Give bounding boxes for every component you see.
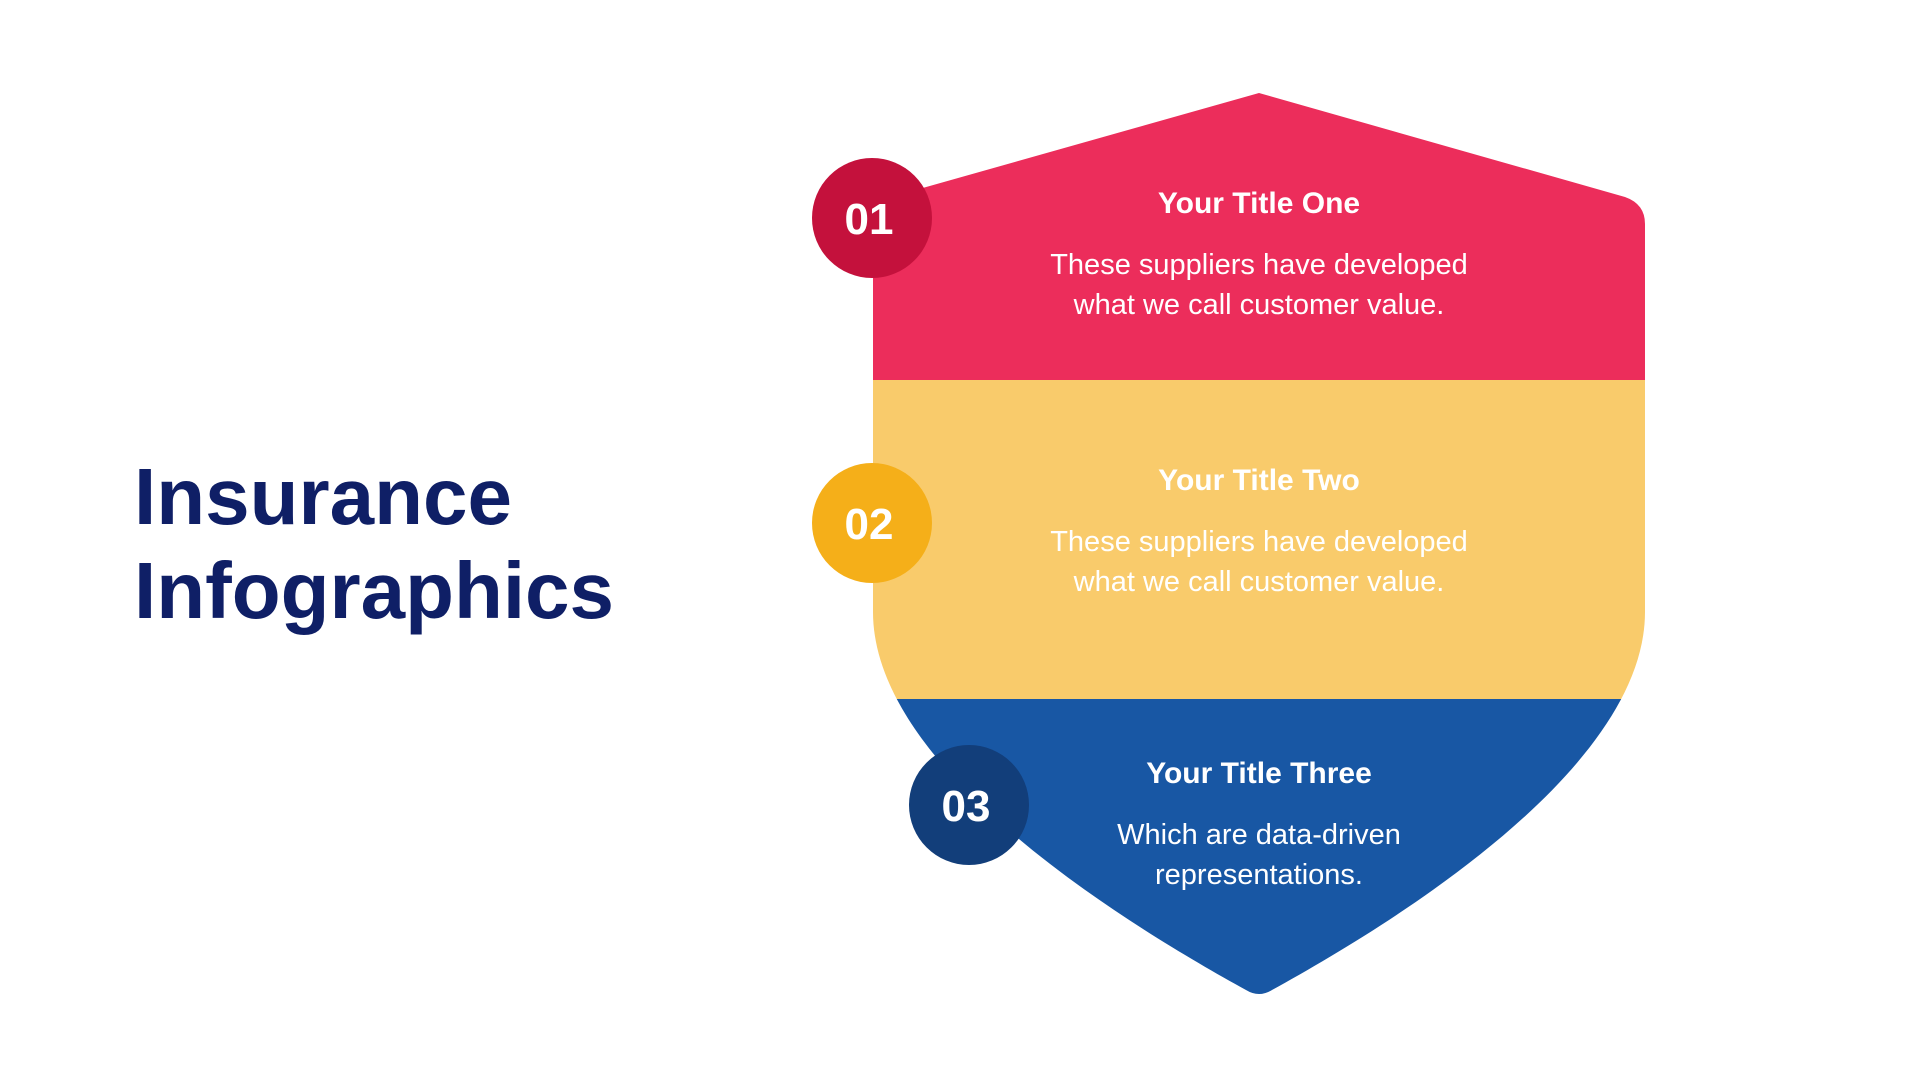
text block 1: These suppliers have developed [1050,249,1468,281]
badge 01: 01 [845,195,893,244]
text block 1 [1050,187,1468,321]
title [134,452,614,635]
badge 02: 02 [845,500,893,549]
text block 3: representations. [1155,859,1363,891]
text block 1: Your Title One [1158,187,1360,220]
shield infographic [812,93,1645,994]
band 1: red [860,80,1660,380]
text block 2: These suppliers have developed [1050,526,1468,558]
text block 2: Your Title Two [1158,464,1360,497]
badge 01 [812,158,932,278]
badge 02 [812,463,932,583]
title: Infographics [134,546,614,635]
badge 03: 03 [942,782,990,831]
text block 3: Which are data-driven [1117,819,1401,851]
band 3: blue [896,699,1622,994]
title: Insurance [134,452,512,541]
text block 2 [1050,464,1468,598]
text block 1: what we call customer value. [1073,289,1444,321]
badge 03 [909,745,1029,865]
band 2: yellow [860,380,1660,700]
text block 3 [1117,757,1401,891]
text block 3: Your Title Three [1146,757,1372,790]
text block 2: what we call customer value. [1073,566,1444,598]
